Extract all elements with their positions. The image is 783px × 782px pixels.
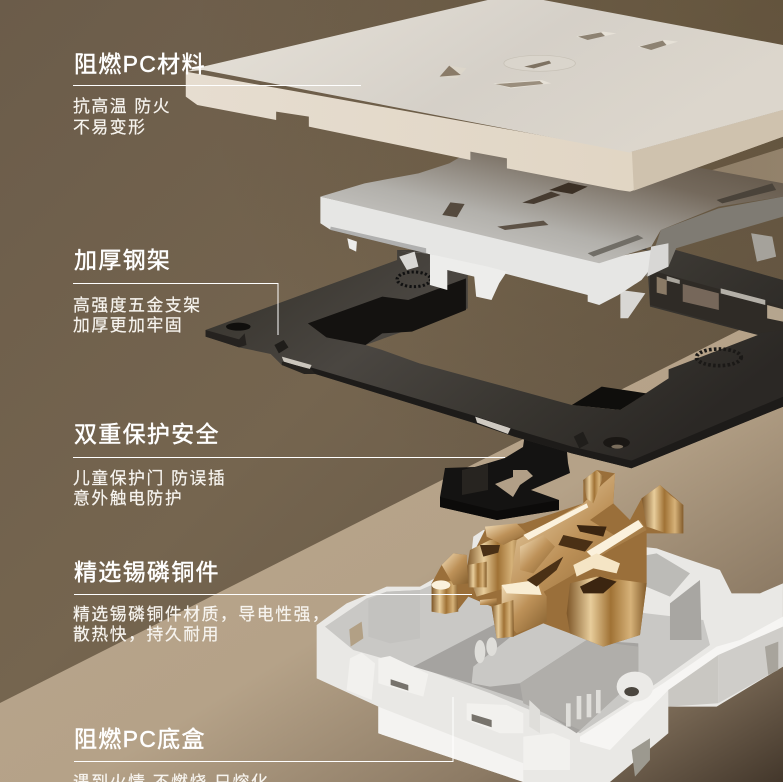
frame back bar with windows bbox=[650, 270, 783, 333]
heading: 阻燃PC底盒 bbox=[74, 726, 206, 752]
frame mount holes bbox=[226, 323, 251, 331]
box clips bbox=[347, 653, 570, 770]
component: beige flame-retardant faceplate bbox=[186, 0, 783, 192]
component: white flame-retardant base box bbox=[317, 530, 783, 782]
heading: 阻燃PC材料 bbox=[74, 51, 206, 77]
background: light lower plane bbox=[0, 308, 783, 782]
callout: thick steel frame: 加厚更加牢固 bbox=[73, 316, 183, 335]
component: silver support plate bbox=[320, 150, 783, 318]
box shadow face bbox=[378, 707, 523, 782]
shutter cross opening bbox=[495, 470, 533, 497]
contact arm upper bbox=[510, 473, 647, 603]
plate logo strips bbox=[588, 235, 643, 257]
box outer shell bbox=[317, 530, 783, 782]
heading: 精选锡磷铜件 bbox=[74, 559, 220, 585]
frame recess bbox=[308, 278, 466, 345]
box window bbox=[349, 622, 363, 647]
plate socket holes bbox=[442, 183, 588, 230]
frame silver tabs bbox=[282, 357, 312, 369]
description: 抗高温 防火 bbox=[73, 97, 171, 116]
plate rim highlight bbox=[647, 243, 668, 277]
box interior floor bbox=[325, 570, 710, 733]
description: 高强度五金支架 bbox=[73, 296, 202, 315]
box screw post bbox=[617, 672, 653, 702]
callout: tin phosphor copper bbox=[73, 559, 472, 644]
plate right tabs bbox=[620, 197, 783, 318]
description: 精选锡磷铜件材质，导电性强， bbox=[73, 605, 330, 624]
callout: double protection: 意外触电防护 bbox=[73, 489, 183, 508]
callout: flame-retardant PC base box bbox=[73, 697, 453, 782]
faceplate socket holes bbox=[440, 32, 678, 88]
contact arm right bbox=[642, 485, 683, 533]
contact main right bbox=[567, 577, 647, 647]
frame body bbox=[206, 247, 783, 468]
contact left bbox=[467, 562, 487, 587]
callout: double protection bbox=[73, 421, 505, 508]
contact centre bbox=[502, 580, 547, 633]
contact silhouette bbox=[432, 470, 683, 647]
callout: flame-retardant PC material bbox=[73, 51, 361, 137]
component: tin-phosphor copper contacts bbox=[432, 470, 683, 647]
callout: tin phosphor copper: 散热快，持久耐用 bbox=[73, 625, 220, 644]
description: 儿童保护门 防误插 bbox=[73, 469, 226, 488]
box ribs bbox=[475, 637, 601, 733]
plate lower clips bbox=[347, 238, 507, 300]
component: dark steel frame bbox=[206, 247, 783, 468]
faceplate sides bbox=[186, 72, 783, 192]
component: protective shutter bbox=[440, 420, 570, 520]
plate side bbox=[320, 197, 668, 305]
faceplate top bbox=[186, 0, 783, 153]
box interior walls bbox=[368, 590, 420, 643]
frame gear mark bbox=[397, 272, 431, 287]
callout: thick steel frame bbox=[73, 247, 278, 335]
heading: 双重保护安全 bbox=[74, 421, 220, 447]
frame lower edge bbox=[282, 359, 783, 468]
heading: 加厚钢架 bbox=[74, 247, 171, 273]
plate top face bbox=[320, 150, 783, 263]
box right rim bbox=[580, 617, 783, 750]
callout: flame-retardant PC material: 不易变形 bbox=[73, 118, 147, 137]
